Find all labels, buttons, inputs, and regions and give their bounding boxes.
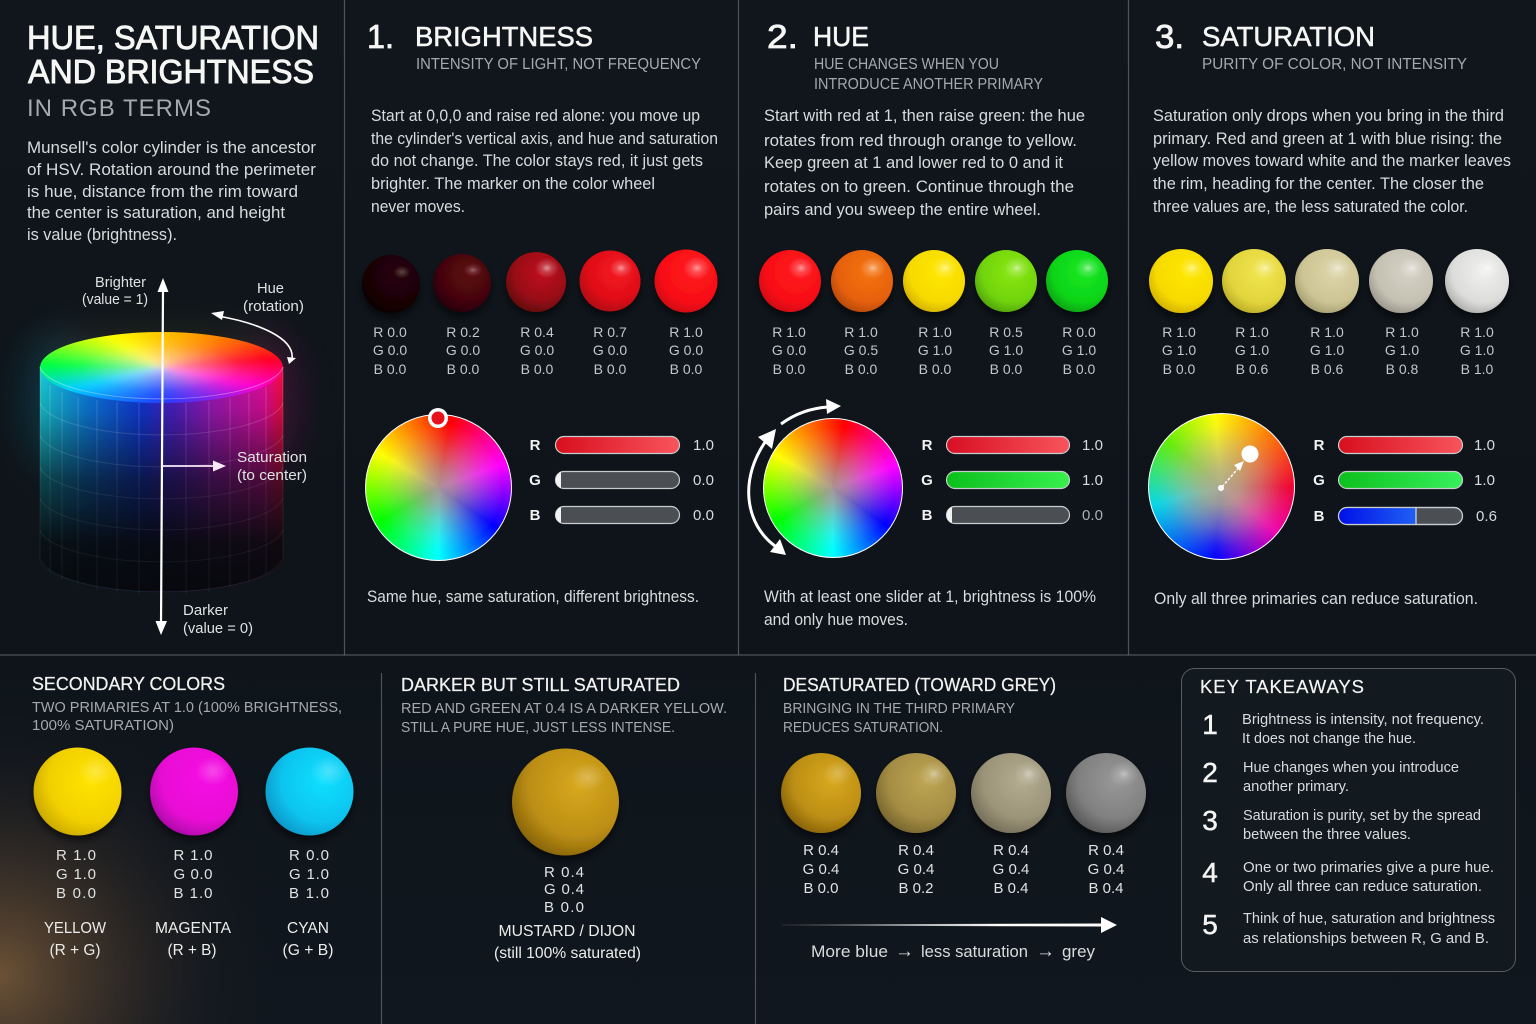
heading: hue (767, 18, 1043, 93)
values: G 1.0 (1235, 342, 1269, 358)
label: mustard (494, 864, 641, 962)
values: R 0.4 (1088, 842, 1124, 859)
values: R 0.4 (520, 324, 554, 340)
intro text: Munsell's color cylinder is the ancestor (27, 139, 317, 157)
values: B 0.0 (670, 361, 703, 377)
body text: Saturation only drops when you bring in the third (1153, 107, 1504, 125)
values: B 0.0 (374, 361, 407, 377)
panel: brightness (362, 18, 718, 606)
values (373, 324, 703, 377)
heading: secondary colors: TWO PRIMARIES AT 1.0 (100% BRIGHTNESS, (32, 700, 342, 716)
values: G 1.0 (1460, 342, 1494, 358)
label: magenta: B 1.0 (174, 885, 212, 902)
sliders: 1.0 (1082, 437, 1103, 454)
values: R 1.0 (1310, 324, 1344, 340)
arrows: rotation around wheel (749, 399, 841, 555)
axis labels (82, 275, 307, 637)
sliders: 0.0 (693, 507, 714, 524)
takeaway 2 (1202, 757, 1459, 795)
values: G 0.4 (1088, 861, 1124, 878)
heading: darker but still saturated (401, 675, 727, 736)
heading: hue: HUE CHANGES WHEN YOU (814, 56, 999, 73)
label: mustard: G 0.4 (544, 881, 584, 898)
values: R 0.0 (1062, 324, 1096, 340)
takeaway 1: It does not change the hue. (1242, 730, 1416, 747)
heading: brightness: 1. (367, 18, 394, 55)
heading: saturation (1155, 18, 1467, 73)
color wheel (763, 418, 903, 558)
takeaway 4: 4 (1202, 857, 1218, 888)
values: R 1.0 (669, 324, 703, 340)
label: mustard: MUSTARD / DIJON (498, 923, 636, 940)
values: G 0.4 (898, 861, 934, 878)
values: R 0.0 (373, 324, 407, 340)
sliders: B (530, 507, 541, 524)
values: G 0.4 (803, 861, 839, 878)
caption: Only all three primaries can reduce saturation. (1154, 590, 1478, 608)
heading: hue: 2. (767, 18, 798, 55)
axis labels: (value = 1) (82, 292, 148, 308)
caption: Same hue, same saturation, different brightness. (367, 588, 699, 606)
sliders (921, 436, 1103, 524)
panel: desaturated toward grey (781, 675, 1146, 962)
heading: key takeaways: KEY TAKEAWAYS (1200, 676, 1364, 697)
sliders: R (922, 437, 933, 454)
values: G 0.0 (446, 342, 480, 358)
takeaway 3: between the three values. (1243, 826, 1411, 843)
takeaway 2: Hue changes when you introduce (1243, 759, 1459, 776)
sphere: cyan (266, 748, 354, 836)
takeaway 5: Think of hue, saturation and brightness (1243, 910, 1495, 927)
values: B 0.2 (898, 880, 934, 897)
panel: key takeaways (1182, 668, 1516, 972)
sliders (529, 436, 714, 524)
heading: darker but still saturated: DARKER BUT STILL SATURATED (401, 675, 680, 695)
values: R 1.0 (1235, 324, 1269, 340)
heading: darker but still saturated: RED AND GREEN AT 0.4 IS A DARKER YELLOW. (401, 701, 727, 717)
values: R 1.0 (918, 324, 952, 340)
sliders: 0.0 (1082, 507, 1103, 524)
heading: darker but still saturated: STILL A PURE HUE, JUST LESS INTENSE. (401, 720, 675, 736)
sliders: R (530, 437, 541, 454)
label: magenta: G 0.0 (174, 866, 212, 883)
caption: grey (1062, 942, 1095, 961)
values: R 1.0 (844, 324, 878, 340)
intro text: the center is saturation, and height (27, 204, 285, 222)
values: R 0.4 (803, 842, 839, 859)
axis labels: (to center) (237, 468, 307, 484)
values: B 0.8 (1386, 361, 1419, 377)
values: R 1.0 (1385, 324, 1419, 340)
heading: saturation: 3. (1155, 18, 1184, 55)
values: G 1.0 (918, 342, 952, 358)
chart: color cylinder (25, 275, 307, 637)
label: cyan (282, 847, 334, 959)
body text: rotates on to green. Continue through the (764, 178, 1074, 196)
heading: brightness: INTENSITY OF LIGHT, NOT FREQUENCY (416, 56, 701, 73)
body text: the cylinder's vertical axis, and hue and saturation (371, 130, 718, 148)
spheres: hue sweep (759, 250, 1108, 312)
panel: darker but still saturated (401, 675, 727, 962)
values: B 0.0 (594, 361, 627, 377)
takeaway 1 (1202, 709, 1484, 747)
caption: → (1036, 941, 1055, 962)
heading: hue: HUE (813, 21, 869, 52)
takeaway 5: as relationships between R, G and B. (1243, 930, 1489, 947)
heading: desaturated: BRINGING IN THE THIRD PRIMARY (783, 701, 1015, 717)
takeaway 4: Only all three can reduce saturation. (1243, 878, 1482, 895)
spheres: red ramp (362, 250, 718, 313)
values: G 1.0 (1162, 342, 1196, 358)
axis labels: Darker (183, 603, 228, 619)
title: HUE, SATURATION (27, 19, 319, 56)
body text (764, 107, 1085, 219)
caption (764, 588, 1096, 629)
sliders: 1.0 (1474, 437, 1495, 454)
body text: brighter. The marker on the color wheel (371, 175, 655, 193)
heading: saturation: PURITY OF COLOR, NOT INTENSITY (1202, 56, 1467, 73)
values: R 0.5 (989, 324, 1023, 340)
intro text: of HSV. Rotation around the perimeter (27, 161, 317, 179)
values: G 1.0 (1062, 342, 1096, 358)
takeaway 1: 1 (1202, 709, 1218, 740)
values: G 0.0 (373, 342, 407, 358)
values: R 0.2 (446, 324, 480, 340)
sliders: B (1314, 508, 1325, 525)
takeaway 3 (1202, 805, 1481, 843)
sliders: G (529, 472, 541, 489)
body text: Start with red at 1, then raise green: the hue (764, 107, 1085, 125)
heading: saturation: SATURATION (1202, 21, 1375, 52)
body text: rotates from red through orange to yellow. (764, 132, 1077, 150)
values: B 0.0 (773, 361, 806, 377)
axis labels: Brighter (95, 275, 146, 291)
caption: less saturation (921, 942, 1028, 961)
caption: → (895, 941, 914, 962)
values: G 1.0 (989, 342, 1023, 358)
arrow: more blue (782, 917, 1117, 933)
label: yellow: R 1.0 (56, 847, 96, 864)
intro text: is hue, distance from the rim toward (27, 183, 298, 201)
body text: do not change. The color stays red, it just gets (371, 152, 703, 170)
values (803, 842, 1124, 897)
sliders: R (1314, 437, 1325, 454)
label: yellow (44, 847, 107, 959)
body text: pairs and you sweep the entire wheel. (764, 201, 1041, 219)
values: B 0.6 (1311, 361, 1344, 377)
sliders: G (921, 472, 933, 489)
intro text: is value (brightness). (27, 226, 177, 244)
values (1162, 324, 1494, 377)
label: yellow: YELLOW (44, 920, 107, 937)
values: G 0.0 (669, 342, 703, 358)
values: B 0.0 (521, 361, 554, 377)
values: G 0.0 (593, 342, 627, 358)
label: yellow: B 0.0 (56, 885, 96, 902)
sphere: magenta (150, 748, 238, 836)
values: B 0.0 (1163, 361, 1196, 377)
takeaway 2: 2 (1202, 757, 1218, 788)
heading: desaturated (783, 675, 1056, 736)
label: mustard: R 0.4 (544, 864, 584, 881)
takeaway 5: 5 (1202, 909, 1218, 940)
values: R 0.4 (993, 842, 1029, 859)
spheres: mustard to grey (781, 753, 1146, 833)
cylinder top face (40, 332, 283, 403)
values: R 1.0 (1460, 324, 1494, 340)
heading: brightness: BRIGHTNESS (415, 21, 593, 52)
spheres: desaturating yellow (1149, 249, 1509, 313)
body text: the rim, heading for the center. The closer the (1153, 175, 1484, 193)
caption: With at least one slider at 1, brightness is 100% (764, 588, 1096, 606)
intro text (27, 139, 317, 244)
values: B 0.0 (845, 361, 878, 377)
sliders: 0.0 (693, 472, 714, 489)
label: mustard: B 0.0 (544, 899, 584, 916)
axis labels: Saturation (237, 450, 307, 466)
values: B 0.0 (990, 361, 1023, 377)
values: B 0.0 (803, 880, 839, 897)
title: AND BRIGHTNESS (28, 53, 314, 90)
values: R 1.0 (772, 324, 806, 340)
body text: yellow moves toward white and the marker leaves (1153, 152, 1511, 170)
panel: secondary colors (32, 674, 354, 959)
sliders: 1.0 (693, 437, 714, 454)
takeaway 2: another primary. (1243, 778, 1349, 795)
values: B 0.4 (1088, 880, 1124, 897)
label: magenta (155, 847, 231, 959)
takeaway 5 (1202, 909, 1495, 947)
values: G 0.0 (772, 342, 806, 358)
color wheel (1148, 412, 1295, 560)
body text: never moves. (371, 198, 465, 216)
heading: desaturated: DESATURATED (TOWARD GREY) (783, 675, 1056, 695)
takeaway 4: One or two primaries give a pure hue. (1243, 859, 1494, 876)
label: cyan: CYAN (287, 920, 329, 937)
panel: intro (25, 19, 319, 637)
sliders: B (922, 507, 933, 524)
values: R 0.4 (898, 842, 934, 859)
values: G 0.0 (520, 342, 554, 358)
heading: secondary colors: 100% SATURATION) (32, 718, 174, 734)
values: B 0.4 (993, 880, 1029, 897)
values: G 0.5 (844, 342, 878, 358)
body text: Keep green at 1 and lower red to 0 and it (764, 154, 1063, 172)
axis labels: (value = 0) (183, 621, 253, 637)
title (27, 19, 319, 90)
sliders: 0.6 (1476, 508, 1497, 525)
sliders: 1.0 (1082, 472, 1103, 489)
label: yellow: G 1.0 (56, 866, 96, 883)
values: R 1.0 (1162, 324, 1196, 340)
values: R 0.7 (593, 324, 627, 340)
axis arrow: brightness (156, 278, 168, 635)
heading: secondary colors (32, 674, 342, 734)
label: cyan: G 1.0 (289, 866, 329, 883)
arrow: hue rotation (211, 311, 296, 364)
takeaway 3: Saturation is purity, set by the spread (1243, 807, 1481, 824)
takeaway 4 (1202, 857, 1494, 895)
label: magenta: MAGENTA (155, 920, 231, 937)
heading: hue: INTRODUCE ANOTHER PRIMARY (814, 76, 1043, 93)
sphere: mustard (512, 748, 619, 856)
label: cyan: (G + B) (282, 942, 334, 959)
values: B 0.0 (447, 361, 480, 377)
caption: and only hue moves. (764, 611, 908, 629)
axis labels: (rotation) (243, 299, 304, 315)
caption (811, 941, 1095, 962)
label: cyan: R 0.0 (289, 847, 329, 864)
values: B 0.6 (1236, 361, 1269, 377)
heading: brightness (367, 18, 701, 73)
body text: primary. Red and green at 1 with blue rising: the (1153, 130, 1502, 148)
axis labels: Hue (257, 281, 284, 297)
caption: More blue (811, 942, 888, 961)
values: B 0.0 (919, 361, 952, 377)
body text (371, 107, 718, 216)
takeaway 3: 3 (1202, 805, 1218, 836)
sliders (1313, 436, 1497, 525)
values: G 1.0 (1385, 342, 1419, 358)
panel: hue (749, 18, 1108, 629)
body text: Start at 0,0,0 and raise red alone: you move up (371, 107, 700, 125)
sliders: G (1313, 472, 1325, 489)
wheel marker (428, 408, 448, 428)
body text (1153, 107, 1511, 216)
values: B 0.0 (1063, 361, 1096, 377)
label: cyan: B 1.0 (289, 885, 329, 902)
values: G 1.0 (1310, 342, 1344, 358)
sphere: yellow (34, 748, 122, 836)
label: mustard: (still 100% saturated) (494, 945, 641, 962)
panel: saturation (1148, 18, 1511, 608)
heading: secondary colors: SECONDARY COLORS (32, 674, 225, 694)
values: G 0.4 (993, 861, 1029, 878)
label: magenta: (R + B) (168, 942, 216, 959)
sliders: 1.0 (1474, 472, 1495, 489)
label: yellow: (R + G) (50, 942, 100, 959)
takeaway 1: Brightness is intensity, not frequency. (1242, 711, 1484, 728)
subtitle: IN RGB TERMS (27, 95, 211, 122)
wheel marker moving to rim (1218, 446, 1258, 491)
values (772, 324, 1096, 377)
values: B 1.0 (1461, 361, 1494, 377)
color wheel (365, 414, 512, 560)
label: magenta: R 1.0 (174, 847, 212, 864)
body text: three values are, the less saturated the color. (1153, 198, 1468, 216)
heading: desaturated: REDUCES SATURATION. (783, 720, 943, 736)
arrow: saturation (162, 460, 226, 472)
